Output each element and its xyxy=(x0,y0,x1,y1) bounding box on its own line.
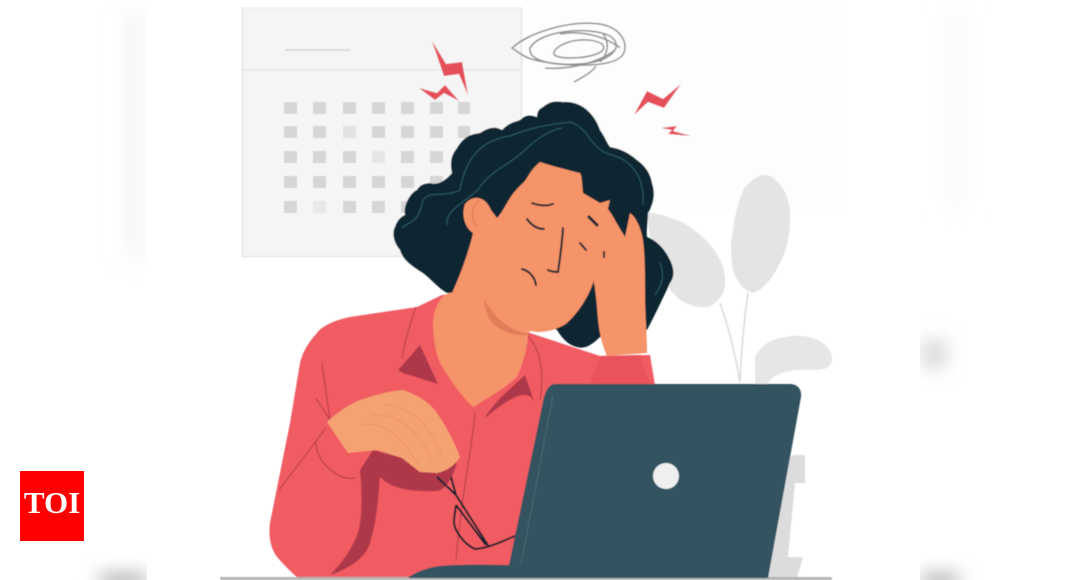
glasses xyxy=(437,477,515,549)
plant stand xyxy=(760,455,805,577)
ground line xyxy=(220,577,832,580)
face xyxy=(452,162,610,332)
neck shadow crease xyxy=(484,298,530,335)
TOI logo: TOI xyxy=(24,485,80,520)
scribble above head xyxy=(512,23,625,82)
artwork xyxy=(220,8,848,580)
finger lines xyxy=(362,405,443,465)
shirt fold lines xyxy=(279,307,542,560)
TOI logo xyxy=(20,471,84,541)
ear inner shadow xyxy=(473,200,480,226)
shirt shadow: collar and arm xyxy=(330,345,650,575)
lower hand holding glasses xyxy=(327,390,460,473)
neck and chest xyxy=(433,280,535,407)
laptop camera dot xyxy=(653,463,679,489)
stress bolts xyxy=(419,41,691,136)
plant xyxy=(647,175,832,384)
laptop xyxy=(408,384,801,578)
hair xyxy=(393,102,673,348)
calendar xyxy=(242,8,522,256)
hand on forehead xyxy=(593,203,647,356)
facial features xyxy=(522,203,604,285)
hair highlights xyxy=(402,122,662,295)
central white panel xyxy=(147,0,920,580)
blurred side background xyxy=(100,10,967,580)
faint wall panel xyxy=(530,8,848,208)
shirt body xyxy=(269,293,655,577)
